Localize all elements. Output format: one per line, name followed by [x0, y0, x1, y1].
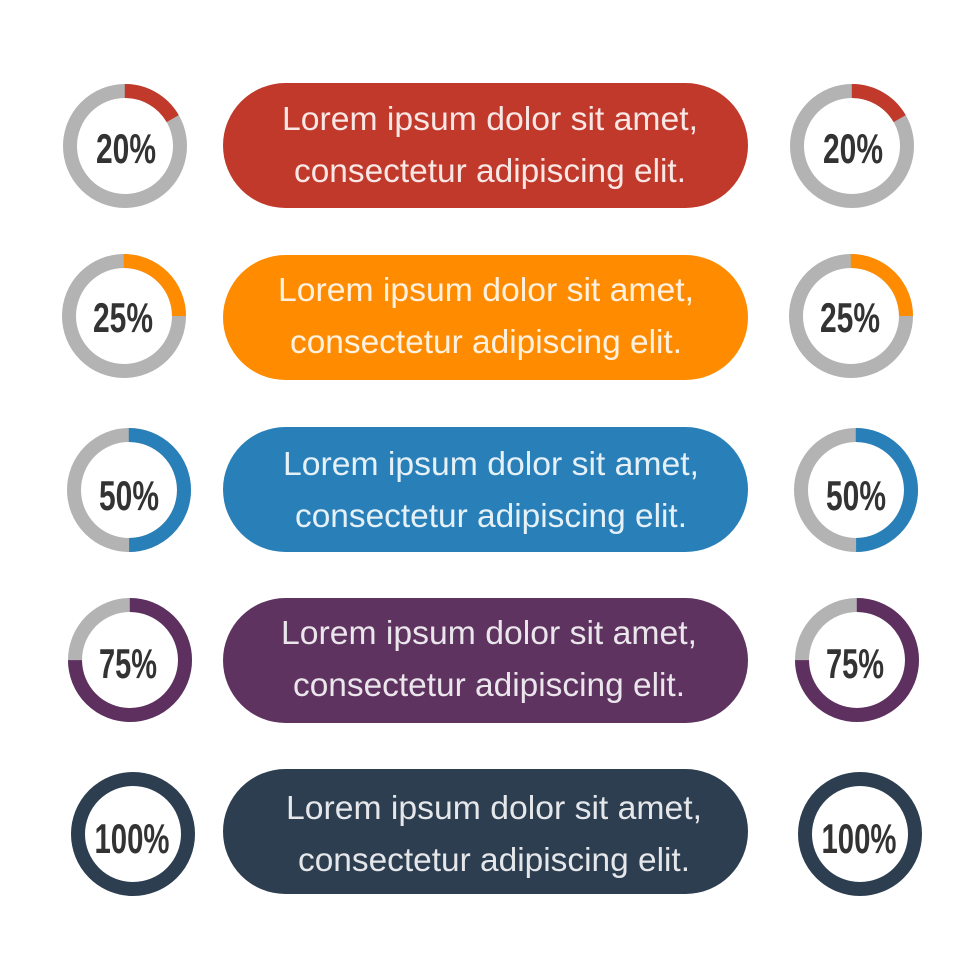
donut: right 25%: 25% [820, 294, 880, 341]
donut: right 20% [797, 91, 907, 201]
donut: left 75%: 75% [99, 640, 157, 687]
banner: purple: consectetur adipiscing elit. [293, 666, 685, 703]
banner: red [223, 83, 748, 208]
donut: right 100%: 100% [822, 815, 896, 862]
banner: navy [223, 769, 748, 894]
donut: left 100% [78, 779, 188, 889]
donut: right 50% [801, 435, 911, 545]
row: 100% [78, 769, 915, 894]
row: 50% [74, 427, 911, 552]
banner: red: consectetur adipiscing elit. [294, 152, 686, 189]
row: 25% [69, 255, 906, 380]
donut: left 100%: 100% [94, 815, 170, 862]
donut: right 75%: 75% [826, 640, 884, 687]
banner: navy: consectetur adipiscing elit. [298, 841, 690, 878]
donut: left 25% [69, 261, 179, 371]
banner: navy: Lorem ipsum dolor sit amet, [286, 789, 702, 826]
donut: left 20% [70, 91, 180, 201]
donut: right 75% [802, 605, 912, 715]
donut: right 100% [805, 779, 915, 889]
donut: right 50%: 50% [826, 472, 886, 519]
donut: left 20%: 20% [96, 125, 156, 172]
banner: purple: Lorem ipsum dolor sit amet, [281, 614, 697, 651]
banner: orange: Lorem ipsum dolor sit amet, [278, 271, 694, 308]
banner: orange [223, 255, 748, 380]
banner: purple [223, 598, 748, 723]
banner: blue: consectetur adipiscing elit. [295, 497, 687, 534]
donut: left 75% [75, 605, 185, 715]
row: 75% [75, 598, 912, 723]
donut: right 20%: 20% [823, 125, 883, 172]
banner: blue: Lorem ipsum dolor sit amet, [283, 445, 699, 482]
donut: left 50%: 50% [99, 472, 159, 519]
row: 20% [70, 83, 907, 208]
donut: left 50% [74, 435, 184, 545]
donut: right 25% [796, 261, 906, 371]
banner: red: Lorem ipsum dolor sit amet, [282, 100, 698, 137]
donut: left 25%: 25% [93, 294, 153, 341]
banner: orange: consectetur adipiscing elit. [290, 323, 682, 360]
banner: blue [223, 427, 748, 552]
